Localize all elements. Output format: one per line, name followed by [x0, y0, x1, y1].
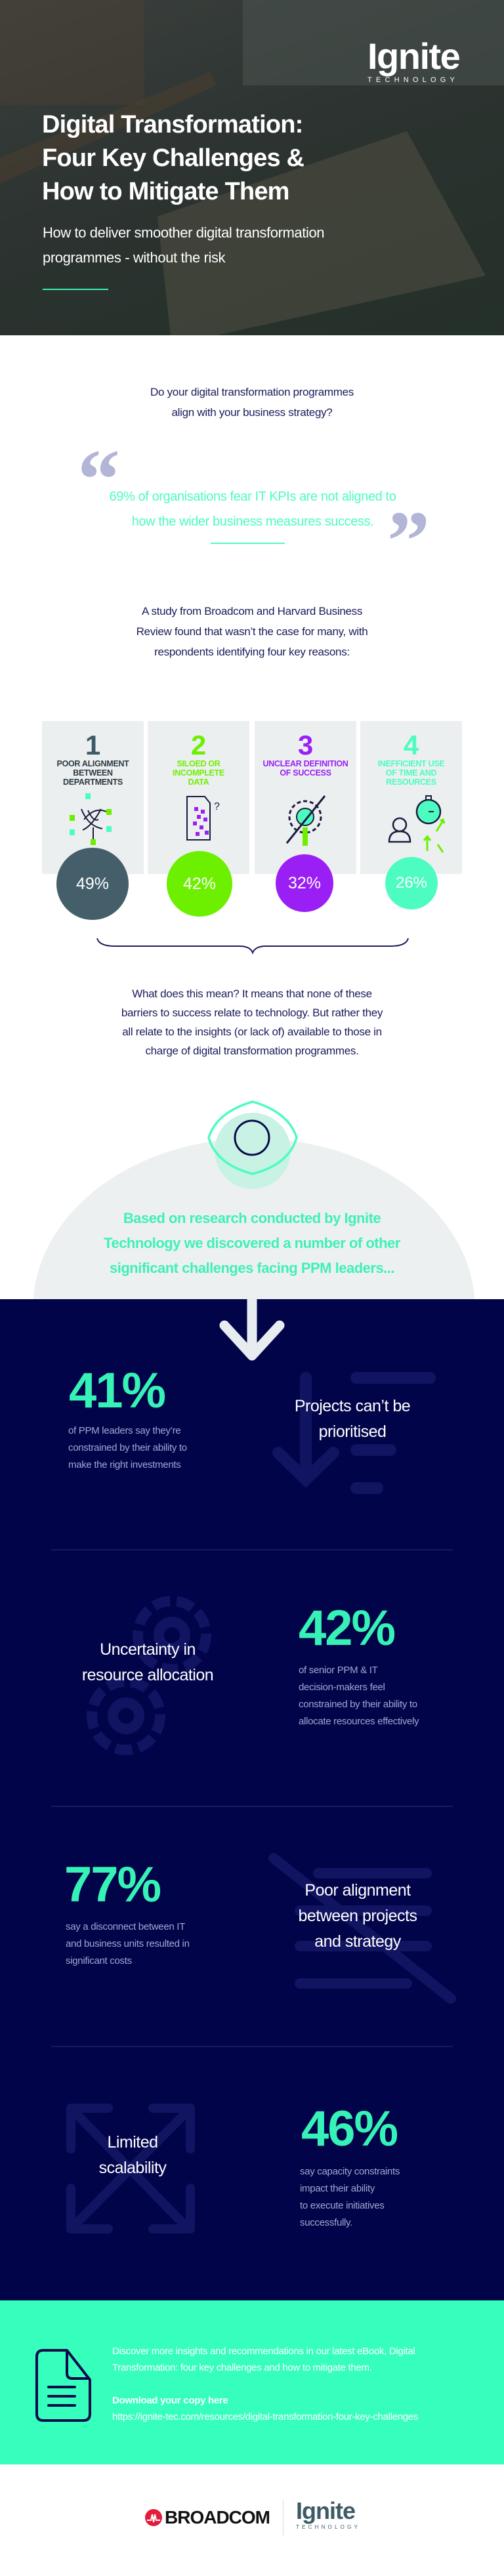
card 3	[255, 721, 356, 874]
hero banner	[0, 0, 504, 335]
icon: person, stopwatch, arrows	[388, 795, 445, 853]
desc 41%	[68, 1425, 187, 1470]
stat block 3	[64, 1853, 456, 2004]
heading: poor alignment: Poor alignment	[304, 1881, 411, 1900]
desc 41%: make the right investments	[68, 1459, 180, 1470]
stat 41%: 41%	[69, 1363, 165, 1419]
stat 42%: 42%	[299, 1600, 394, 1656]
card 3: UNCLEAR DEFINITION	[262, 759, 348, 768]
text: based on research: significant challenges facing PPM leaders...	[110, 1260, 394, 1276]
card 1: POOR ALIGNMENT	[57, 759, 129, 768]
study text	[136, 605, 368, 658]
heading: projects can't be prioritised	[295, 1397, 410, 1441]
desc 46%	[300, 2166, 400, 2228]
title: Digital Transformation:	[42, 111, 303, 138]
icon: document	[35, 2349, 91, 2422]
desc 42%	[299, 1665, 419, 1727]
stat block 1	[68, 1363, 436, 1494]
CTA text: https://ignite-tec.com/resources/digital-transformation-four-key-challenges	[112, 2411, 418, 2422]
brace	[96, 938, 409, 955]
desc 77%: and business units resulted in	[66, 1938, 190, 1949]
circle 26%: 26%	[396, 874, 427, 892]
text: based on research	[104, 1210, 400, 1276]
desc 41%: constrained by their ability to	[68, 1442, 187, 1453]
logo: Broadcom: BROADCOM	[165, 2507, 270, 2527]
circle 26%	[385, 857, 438, 909]
intro question: Do your digital transformation programmes	[150, 386, 354, 398]
heading: poor alignment: and strategy	[314, 1932, 401, 1951]
desc 46%: to execute initiatives	[300, 2200, 384, 2211]
circle 32%	[276, 854, 333, 912]
panel: four reasons	[42, 721, 462, 920]
circle 32%: 32%	[288, 874, 321, 892]
quote text: 69% of organisations fear IT KPIs are not aligned to	[110, 489, 396, 504]
card 3: OF SUCCESS	[280, 768, 331, 778]
text: based on research: Technology we discovered a number of other	[104, 1235, 400, 1251]
logo: Ignite Technology: TECHNOLOGY	[368, 76, 459, 84]
desc 42%: allocate resources effectively	[299, 1716, 419, 1727]
faded icon: expand arrows	[66, 2104, 195, 2233]
faded icon: prioritise	[272, 1372, 436, 1494]
intro question	[150, 386, 354, 419]
accent line	[43, 289, 108, 290]
intro question: align with your business strategy?	[172, 406, 332, 419]
text: what does this mean: barriers to success relate to technology. But rather they	[121, 1007, 383, 1019]
title: How to Mitigate Them	[42, 178, 289, 205]
hero background photo shapes	[0, 0, 504, 335]
icon: eye	[207, 1100, 298, 1189]
icon: data file	[186, 796, 220, 841]
desc 77%: significant costs	[66, 1955, 132, 1966]
desc 46%: impact their ability	[300, 2183, 375, 2194]
grey semicircle panel	[33, 1138, 475, 1480]
heading: poor alignment: between projects	[298, 1907, 417, 1925]
desc 42%: decision-makers feel	[299, 1682, 385, 1693]
heading: uncertainty: Uncertainty in	[100, 1640, 196, 1659]
circle 49%	[56, 848, 129, 920]
faded icon: misalignment	[268, 1853, 456, 2004]
CTA text	[112, 2346, 418, 2422]
CTA text: Discover more insights and recommendations in our latest eBook, Digital	[112, 2346, 415, 2357]
heading: limited scalability: Limited	[107, 2133, 158, 2151]
desc 42%: of senior PPM & IT	[299, 1665, 377, 1676]
card 4: RESOURCES	[386, 778, 436, 787]
heading: limited scalability	[99, 2133, 167, 2177]
desc 77%: say a disconnect between IT	[66, 1921, 185, 1932]
text: what does this mean	[121, 987, 383, 1057]
quote text: how the wider business measures success.	[132, 514, 373, 529]
card 2: 2	[191, 730, 206, 760]
heading: uncertainty: resource allocation	[82, 1666, 213, 1684]
card 1: DEPARTMENTS	[63, 778, 123, 787]
circle 49%: 49%	[76, 875, 109, 893]
stat block 2	[82, 1596, 419, 1755]
desc 46%: say capacity constraints	[300, 2166, 400, 2177]
underline	[211, 543, 285, 544]
CTA text: Transformation: four key challenges and how to mitigate them.	[112, 2362, 372, 2373]
heading: uncertainty	[82, 1640, 213, 1684]
icon: gear magnifier crossed	[286, 795, 326, 846]
desc 41%: of PPM leaders say they’re	[68, 1425, 180, 1436]
subtitle: How to deliver smoother digital transformation	[43, 224, 324, 241]
circle 42%	[167, 851, 232, 917]
desc 46%: successfully.	[300, 2217, 352, 2228]
text: what does this mean: What does this mean? It means that none of these	[132, 987, 372, 1000]
card 2: INCOMPLETE	[173, 768, 224, 778]
title: Four Key Challenges &	[42, 144, 304, 172]
CTA panel	[0, 2300, 504, 2464]
card 4	[360, 721, 462, 874]
quote block	[77, 432, 430, 589]
subtitle: programmes - without the risk	[43, 249, 225, 266]
logo: Ignite Technology: Ignite	[368, 35, 459, 77]
title	[42, 111, 304, 205]
study text: Review found that wasn’t the case for many, with	[136, 625, 368, 638]
card 1: 1	[85, 730, 100, 760]
card 4: INEFFICIENT USE	[378, 759, 444, 768]
logo: Ignite Technology: TECHNOLOGY	[296, 2524, 360, 2530]
card 2: SILOED OR	[177, 759, 220, 768]
footer logos	[145, 2497, 360, 2535]
text: what does this mean: charge of digital transformation programmes.	[145, 1045, 359, 1057]
icon: open quote: “	[77, 432, 120, 527]
card 1	[42, 721, 144, 874]
card 2	[148, 721, 249, 874]
stat 46%: 46%	[301, 2101, 397, 2157]
study text: respondents identifying four key reasons:	[154, 646, 350, 658]
card 2: DATA	[188, 778, 209, 787]
CTA text: Download your copy here	[112, 2395, 228, 2406]
desc 42%: constrained by their ability to	[299, 1699, 417, 1710]
heading: projects can't be prioritised: Projects can’t be	[295, 1397, 410, 1415]
heading: poor alignment	[298, 1881, 417, 1951]
card 4: OF TIME AND	[386, 768, 436, 778]
icon: network	[70, 793, 112, 845]
text: what does this mean: all relate to the insights (or lack of) available to those in	[122, 1026, 382, 1038]
study text: A study from Broadcom and Harvard Business	[142, 605, 362, 617]
arrow down	[219, 1299, 285, 1361]
subtitle	[43, 224, 324, 266]
stat 77%: 77%	[64, 1857, 160, 1913]
stat block 4	[66, 2101, 400, 2233]
faded icon: gears	[87, 1596, 211, 1755]
heading: limited scalability: scalability	[99, 2159, 166, 2177]
heading: projects can't be prioritised: prioritised	[319, 1423, 386, 1441]
text: based on research: Based on research conducted by Ignite	[123, 1210, 381, 1226]
card 3: 3	[298, 730, 313, 760]
navy section	[0, 1299, 504, 2300]
circle 42%: 42%	[183, 875, 216, 893]
quote text	[110, 489, 396, 529]
icon: close quote: ”	[387, 494, 430, 589]
card 1: BETWEEN	[73, 768, 113, 778]
card 4: 4	[404, 730, 419, 760]
icon: data file: ?	[214, 801, 220, 812]
desc 77%	[66, 1921, 190, 1966]
logo: Ignite Technology: Ignite	[296, 2497, 355, 2524]
